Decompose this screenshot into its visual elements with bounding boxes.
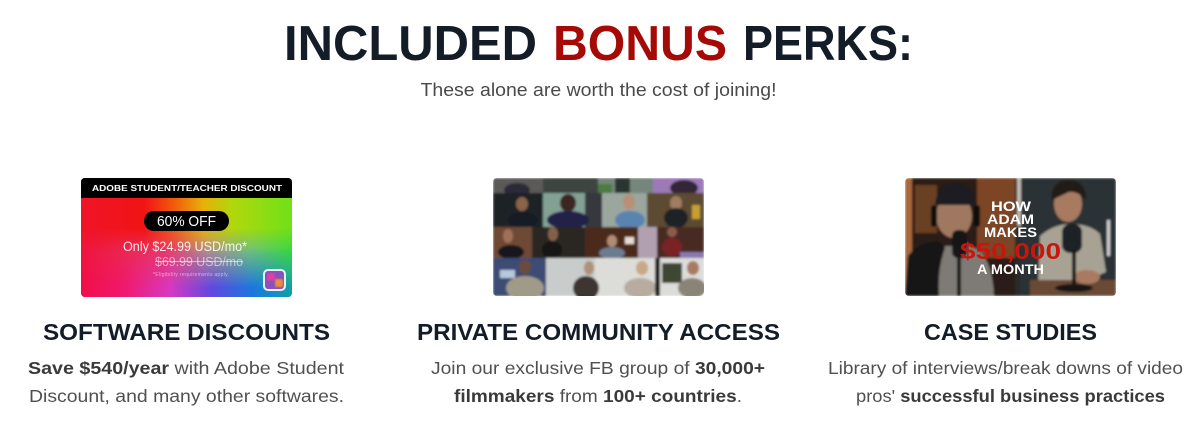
image: Adobe discount card [81,178,292,297]
thumbnail headline: ADAM [987,212,1034,227]
description [431,358,765,406]
description: Join our exclusive FB group of 30,000+ [431,358,765,378]
old price: $69.99 USD/mo [155,254,243,269]
description: Library of interviews/break downs of video [828,358,1183,378]
thumbnail headline: HOW [991,199,1031,214]
badge text: Adobe student/teacher discount: ADOBE STUDENT/TEACHER DISCOUNT [92,183,283,193]
description [28,358,344,406]
panel: private community access [417,178,780,406]
thumbnail headline: $50,000 [960,238,1061,264]
panel: software discounts [28,178,344,406]
heading: SOFTWARE DISCOUNTS [43,319,330,345]
description: Save $540/year with Adobe Student [28,358,344,378]
icon: app tile [264,270,285,290]
subtitle: These alone are worth the cost of joining! [420,80,776,100]
description: Discount, and many other softwares. [29,386,344,406]
thumbnail headline [960,199,1061,277]
title [284,17,913,71]
description: filmmakers from 100+ countries . [454,386,742,406]
price: Only $24.99 USD/mo* [123,239,248,254]
heading: CASE STUDIES [924,319,1097,345]
fine print: *Eligibility requirements apply. [153,272,229,278]
title: INCLUDED [284,17,537,71]
heading: PRIVATE COMMUNITY ACCESS [417,319,780,345]
title: BONUS [553,17,727,71]
panel: case studies [828,178,1183,406]
image: video call grid [493,178,706,300]
description [828,358,1183,406]
pill: 60% off: 60% OFF [157,214,216,230]
pill: 60% off [144,211,229,231]
thumbnail headline: MAKES [984,225,1037,240]
title: PERKS: [743,17,913,71]
thumbnail headline: A MONTH [977,262,1044,277]
image: podcast thumbnail [905,178,1116,296]
description: pros' successful business practices [856,386,1165,406]
